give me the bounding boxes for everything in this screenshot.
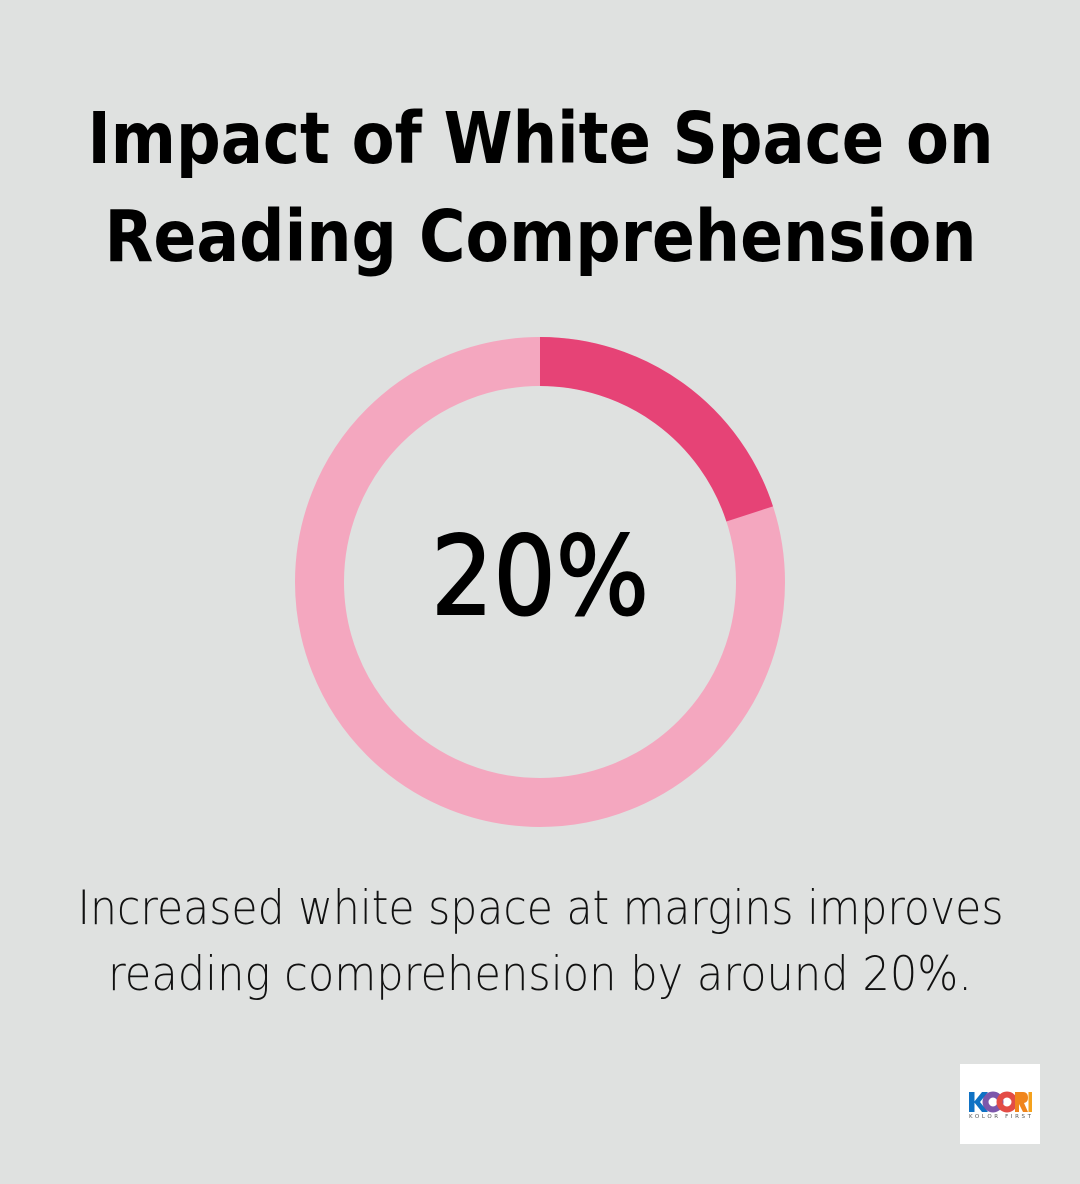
- description: Increased white space at margins improves: [78, 881, 1004, 936]
- logo rings: [986, 1094, 1014, 1110]
- title: [88, 97, 994, 278]
- logo: [960, 1064, 1040, 1144]
- center value: 20%: [431, 513, 649, 640]
- title: Reading Comprehension: [104, 195, 976, 278]
- logo tagline: KOLOR FIRST: [969, 1114, 1032, 1120]
- logo letters R1: [1015, 1092, 1032, 1112]
- description: [78, 881, 1004, 1002]
- logo letter K: [969, 1092, 988, 1112]
- donut chart: 20%: [320, 362, 760, 802]
- description: reading comprehension by around 20%.: [108, 947, 972, 1002]
